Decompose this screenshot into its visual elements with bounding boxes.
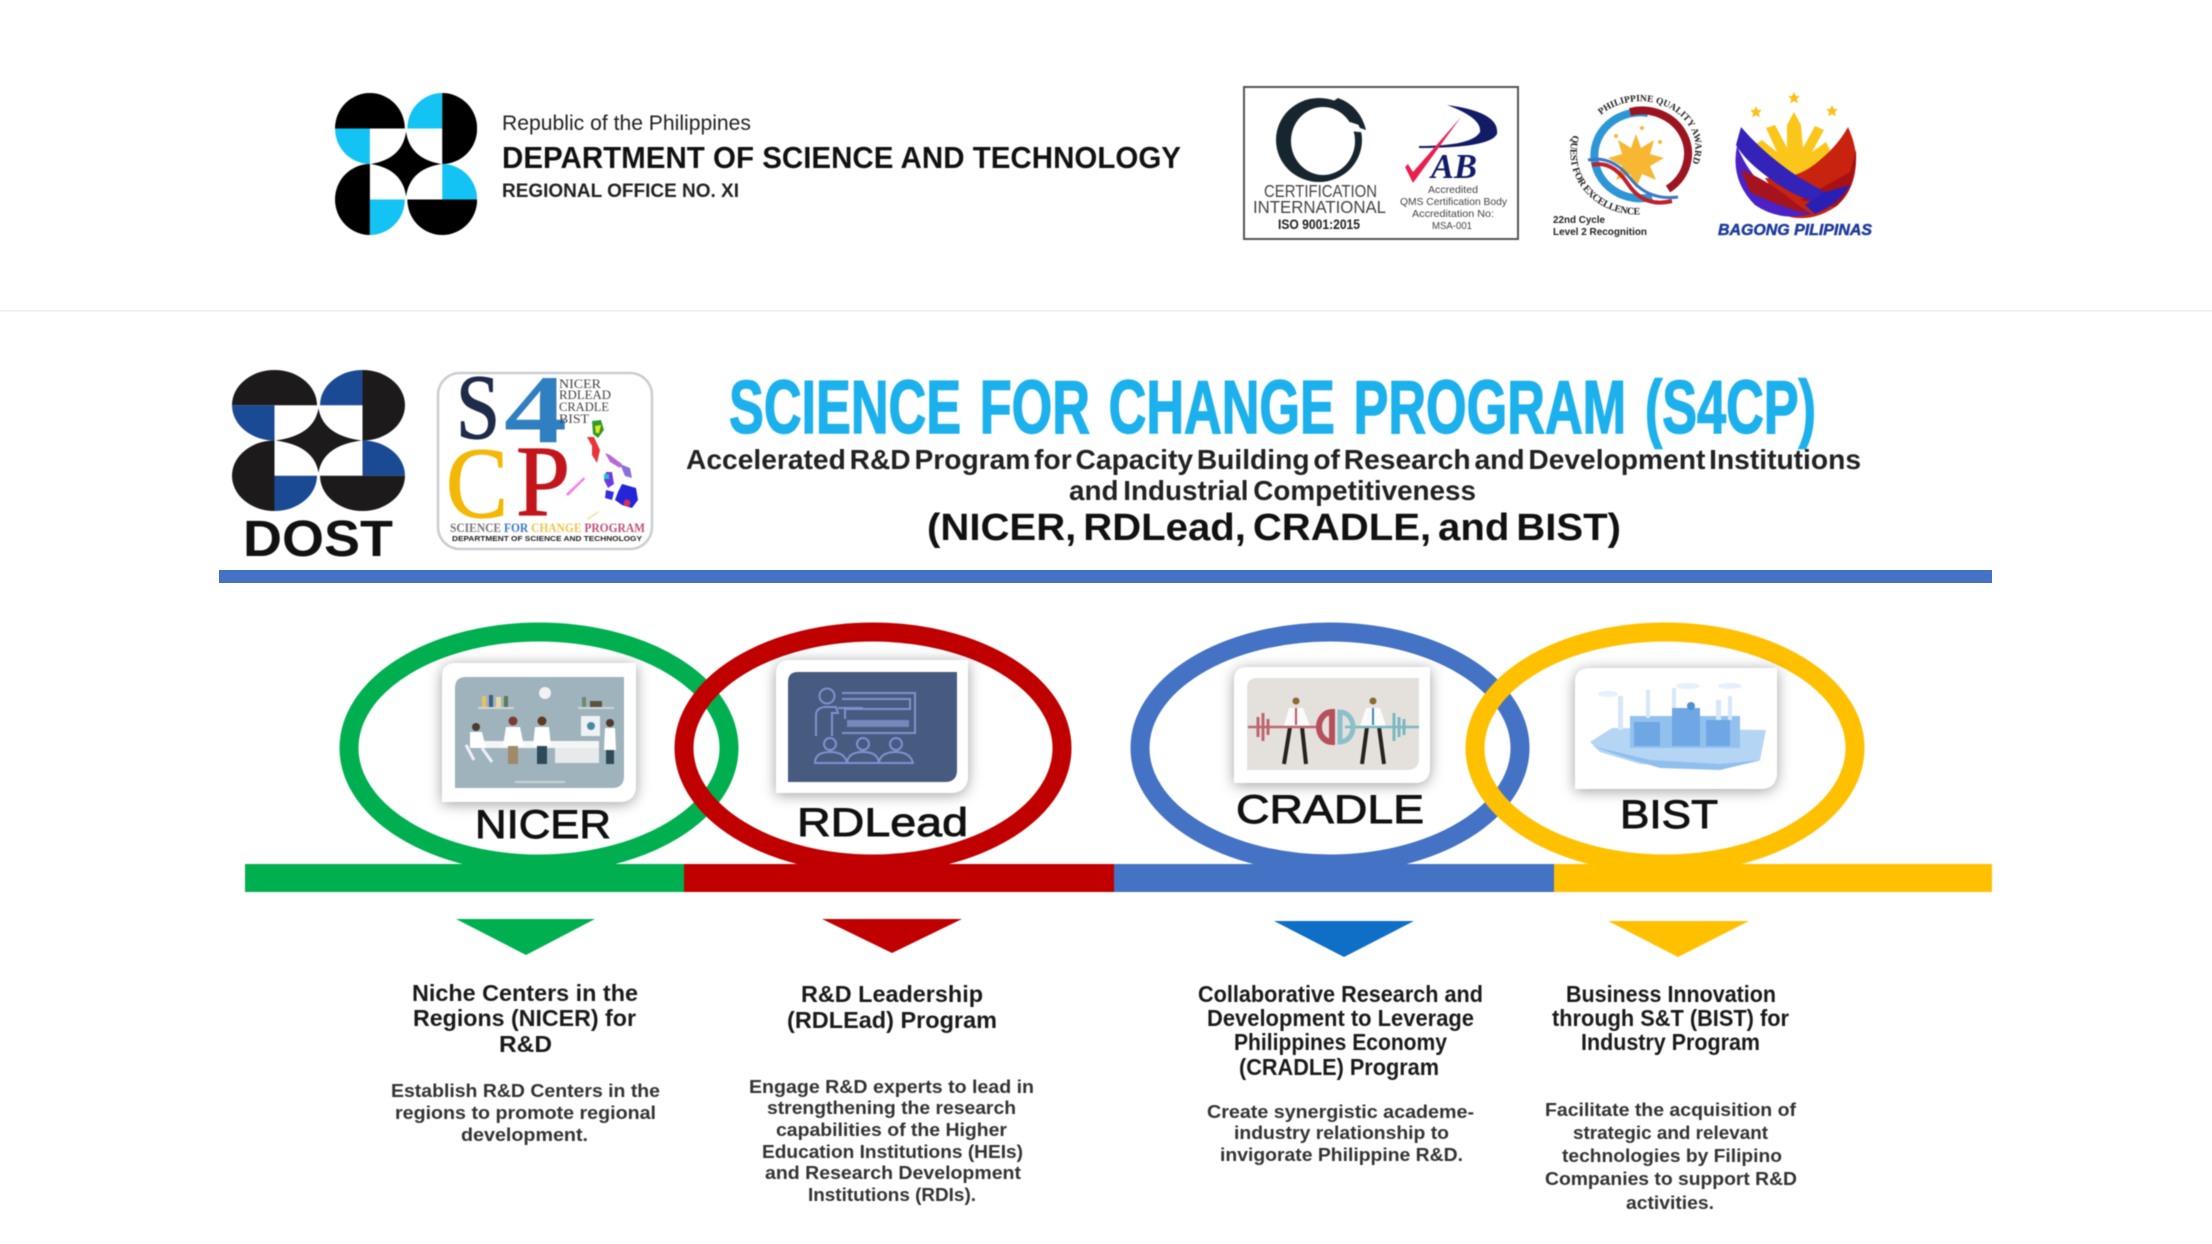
certification badge: ISO and PAB: MSA-001 <box>1432 220 1472 232</box>
red ring arc <box>1630 111 1688 189</box>
ring: NICER <box>349 632 729 864</box>
badge: Philippine Quality Award: 22nd Cycle <box>1553 214 1605 226</box>
text block: NICER <box>391 980 660 1145</box>
description: RDLead: strengthening the research <box>767 1097 1016 1118</box>
certification badge: ISO and PAB: Accreditation No: <box>1412 208 1494 220</box>
heading: CRADLE <box>1198 981 1483 1080</box>
wordmark: BAGONG PILIPINAS <box>1718 222 1872 239</box>
arrow: green <box>456 919 595 955</box>
subtitle: Accelerated R&D Program for Capacity Building of Research and Development Institutions <box>686 444 1861 475</box>
icon: PAB check and swoosh: AB <box>1429 147 1477 186</box>
icon: S4CP logo card: P <box>516 425 570 537</box>
badge: Philippine Quality Award <box>1552 94 1702 238</box>
description: NICER: development. <box>461 1124 588 1145</box>
card: BIST illustration <box>1575 668 1777 789</box>
header: agency letterhead <box>335 93 1181 235</box>
icon: DOST logo navy <box>231 369 406 512</box>
stars <box>1788 92 1800 104</box>
arrow: red <box>822 919 962 953</box>
label: NICER: NICER <box>475 803 611 847</box>
divider <box>0 310 2212 312</box>
icon: S4CP logo card: BIST <box>559 411 589 426</box>
text block: RDLead <box>749 981 1034 1205</box>
blue rule <box>219 570 1992 583</box>
heading: CRADLE: Philippines Economy <box>1234 1029 1447 1055</box>
text: department name: DEPARTMENT OF SCIENCE AND TECHNOLOGY <box>502 140 1181 175</box>
icon: S4CP logo card: SCIENCE FOR CHANGE PROGRAM <box>450 521 645 535</box>
heading: NICER: Niche Centers in the <box>412 980 638 1006</box>
card: RDLead illustration <box>776 660 968 793</box>
description: BIST: activities. <box>1626 1192 1714 1213</box>
diagram: four linked rings and timeline <box>245 632 1992 957</box>
text: regional office: REGIONAL OFFICE NO. XI <box>502 181 739 202</box>
blue band <box>1736 127 1830 203</box>
description: NICER <box>391 1080 660 1145</box>
description: RDLead: and Research Development <box>765 1162 1021 1183</box>
timeline band <box>245 864 1992 892</box>
icon: Philippines map <box>566 420 638 520</box>
description: CRADLE: industry relationship to <box>1234 1122 1449 1143</box>
description: BIST: technologies by Filipino <box>1562 1145 1782 1166</box>
icon: DOST logo cyan <box>334 92 478 236</box>
heading: BIST: Industry Program <box>1581 1029 1760 1055</box>
icon: PAB check and swoosh <box>1405 105 1497 186</box>
label: RDLead: RDLead <box>797 801 968 845</box>
icon: S4CP logo card: DEPARTMENT OF SCIENCE AND TECHNOLOGY <box>452 534 642 543</box>
heading: NICER: Regions (NICER) for <box>413 1005 636 1031</box>
panel: program header <box>232 356 1861 567</box>
description: CRADLE <box>1207 1101 1474 1165</box>
subtitle <box>686 444 1861 506</box>
heading: CRADLE: Collaborative Research and <box>1198 981 1483 1007</box>
card: CRADLE illustration <box>1234 667 1430 783</box>
icon: S4CP logo card: CRADLE <box>559 399 609 414</box>
description: RDLead: Education Institutions (HEIs) <box>762 1141 1023 1162</box>
description: RDLead: Engage R&D experts to lead in <box>749 1076 1034 1097</box>
description: RDLead <box>749 1076 1034 1205</box>
certification badge: ISO and PAB: QMS Certification Body <box>1400 196 1508 208</box>
subtitle: and Industrial Competitiveness <box>1069 475 1476 506</box>
certification badge: ISO and PAB: INTERNATIONAL <box>1253 197 1386 217</box>
certification badge: ISO and PAB: Accredited <box>1428 184 1478 196</box>
ring: CRADLE <box>1140 632 1520 864</box>
description: CRADLE: invigorate Philippine R&D. <box>1220 1144 1463 1165</box>
sun rays <box>1756 112 1830 180</box>
waves <box>1588 159 1678 198</box>
ring: RDLead <box>684 632 1062 864</box>
description: NICER: regions to promote regional <box>395 1102 656 1123</box>
heading: BIST <box>1552 981 1789 1055</box>
description: NICER: Establish R&D Centers in the <box>391 1080 660 1101</box>
certification badge: ISO and PAB <box>1244 87 1518 239</box>
description: BIST <box>1545 1099 1797 1213</box>
badge: Philippine Quality Award: Level 2 Recognition <box>1553 226 1647 238</box>
icon: sun <box>1608 126 1664 188</box>
description: RDLead: Institutions (RDIs). <box>808 1184 976 1205</box>
text: Republic of the Philippines: Republic of the Philippines <box>502 112 751 135</box>
text: DOST: DOST <box>243 510 393 567</box>
heading: RDLead <box>787 981 997 1033</box>
heading: RDLead: (RDLEad) Program <box>787 1007 997 1033</box>
ring: BIST <box>1475 632 1855 864</box>
card: NICER illustration <box>442 663 636 802</box>
heading: BIST: Business Innovation <box>1566 981 1776 1007</box>
certification badge: ISO and PAB: CERTIFICATION <box>1264 181 1377 201</box>
description: BIST: strategic and relevant <box>1573 1122 1768 1143</box>
badge: Bagong Pilipinas <box>1718 92 1872 239</box>
description: CRADLE: Create synergistic academe- <box>1207 1101 1474 1122</box>
arrow: yellow <box>1608 921 1749 957</box>
heading: NICER <box>412 980 638 1057</box>
description: BIST: Facilitate the acquisition of <box>1545 1099 1797 1120</box>
label: CRADLE: CRADLE <box>1236 788 1424 832</box>
text block: BIST <box>1545 981 1797 1213</box>
icon: S4CP logo card <box>438 356 652 549</box>
icon: S4CP logo card: C <box>446 427 508 539</box>
certification badge: ISO and PAB: ISO 9001:2015 <box>1278 217 1360 232</box>
badge: Philippine Quality Award: QUEST FOR EXCELLENCE <box>1569 135 1640 216</box>
heading: NICER: R&D <box>499 1031 552 1057</box>
heading: CRADLE: Development to Leverage <box>1207 1005 1474 1031</box>
text: program list: (NICER, RDLead, CRADLE, and BIST) <box>927 507 1621 549</box>
heading: RDLead: R&D Leadership <box>801 981 983 1007</box>
icon: S4CP logo card: NICER <box>559 376 601 391</box>
heading: CRADLE: (CRADLE) Program <box>1239 1054 1439 1080</box>
icon: S4CP logo card: 4 <box>504 356 567 464</box>
text block: CRADLE <box>1198 981 1483 1165</box>
description: RDLead: capabilities of the Higher <box>776 1119 1007 1140</box>
icon: S4CP logo card: RDLEAD <box>559 387 611 402</box>
badge: Philippine Quality Award: PHILIPPINE QUALITY AWARD <box>1596 94 1702 165</box>
red band <box>1765 127 1856 218</box>
arrow: blue <box>1274 921 1414 957</box>
icon: certification international ring <box>1276 98 1368 182</box>
icon: S4CP logo card: S <box>456 356 500 458</box>
blue ring arc <box>1594 112 1652 198</box>
description: BIST: Companies to support R&D <box>1545 1168 1797 1189</box>
label: BIST: BIST <box>1620 793 1718 837</box>
heading: BIST: through S&T (BIST) for <box>1552 1005 1789 1031</box>
